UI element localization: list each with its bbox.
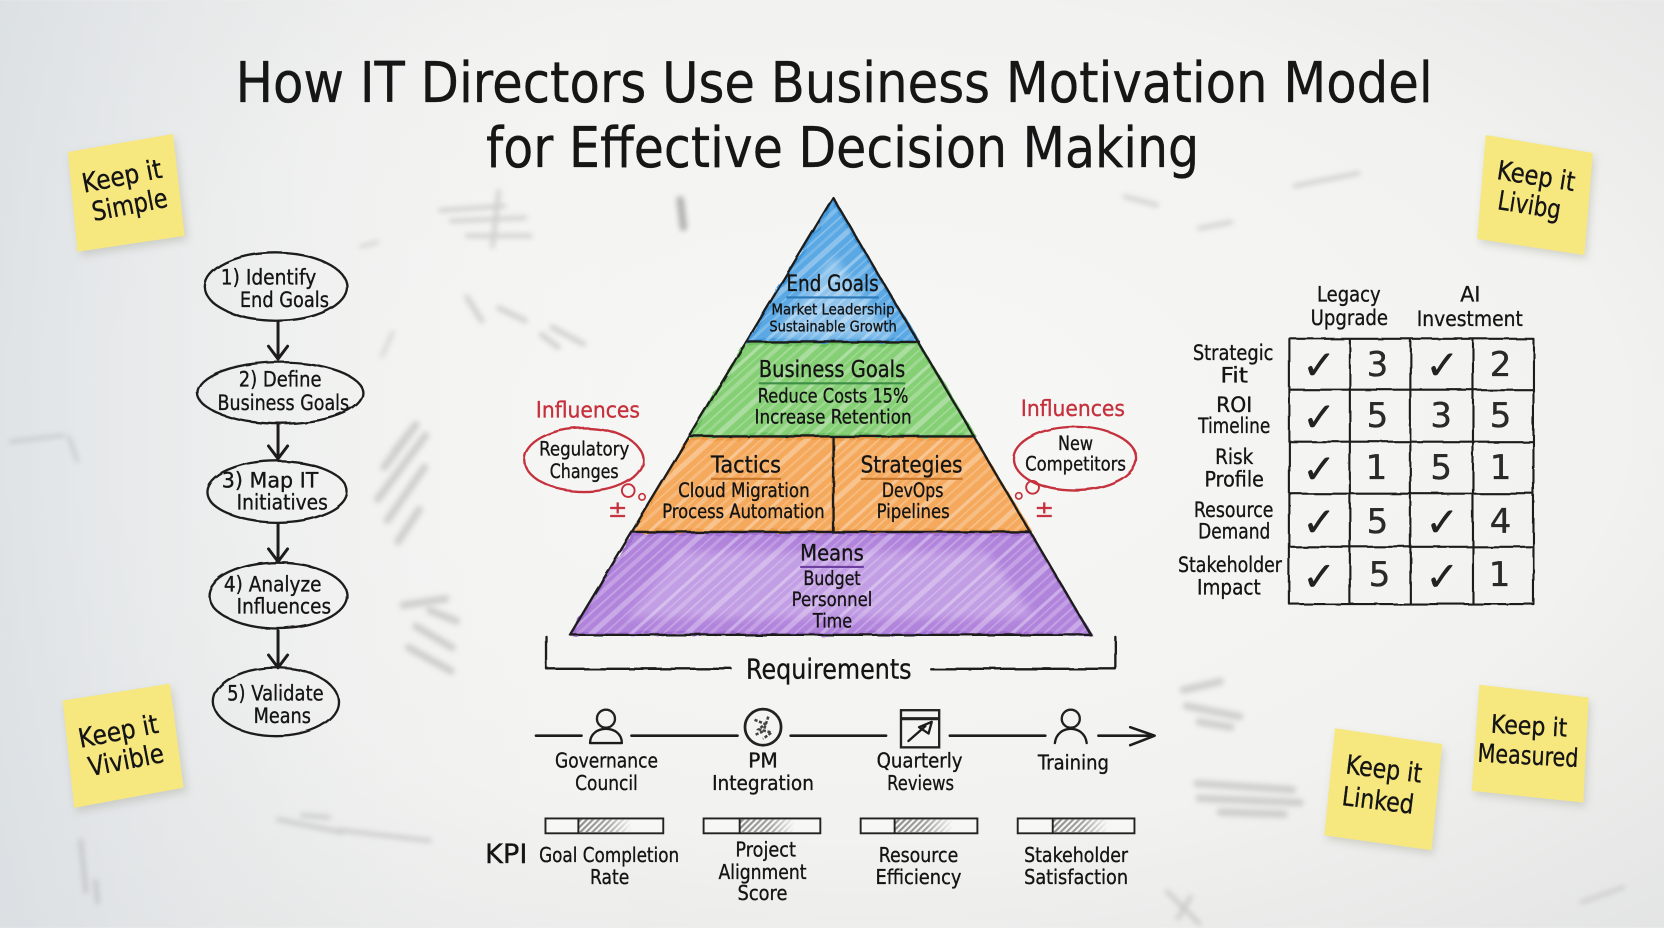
row labels: Fit [1220,363,1248,388]
influence: Regulatory Changes: Regulatory [539,438,629,461]
step 1 [205,253,347,321]
label: Governance Council: Council [575,771,638,795]
column headers: AI [1460,283,1480,308]
influence: New Competitors: New [1058,432,1093,455]
pyramid tier: Strategies: Pipelines [877,500,950,523]
requirements bracket: Requirements [746,652,912,685]
KPI: Project Alignment Score: Score [738,881,787,905]
influence: Regulatory Changes [524,397,645,523]
pyramid tier: Strategies: DevOps [882,479,943,502]
influence: Regulatory Changes: ± [608,495,627,523]
step 5: Means [254,704,311,729]
KPI: Project Alignment Score: Project [735,838,796,862]
KPI row [485,818,1134,905]
step 2 [197,362,363,424]
row labels: Timeline [1197,414,1270,439]
matrix values: 5 [1367,396,1388,436]
arrow: step 3 to 4 [268,523,288,562]
column headers [1311,283,1523,332]
matrix values: 1 [1366,448,1387,488]
matrix values: ✓ [1425,499,1459,546]
step 1: 1) Identify [221,266,316,291]
row labels: Demand [1198,519,1270,544]
pyramid tier: Business Goals: Reduce Costs 15% [758,384,908,407]
sticky note: Keep it Simple: Keep it [79,154,165,200]
matrix values: 1 [1489,555,1510,595]
matrix values: ✓ [1302,553,1336,600]
matrix values: ✓ [1302,499,1336,546]
influence: New Competitors: ± [1034,495,1054,523]
label: Training: Training [1037,751,1109,775]
label: PM Integration: PM [748,749,778,773]
matrix values: 5 [1367,502,1388,542]
pyramid tier: Tactics [634,439,833,531]
matrix values: ✓ [1425,553,1459,600]
influence: New Competitors: Influences [1021,396,1125,422]
pyramid tier: Means: Budget [803,567,861,590]
sticky note: Keep it Livibg [1477,135,1595,259]
matrix values [1302,342,1511,600]
sticky note: Keep it Measured: Measured [1477,739,1579,774]
pyramid tier: Means: Time [812,609,852,632]
matrix values: 2 [1490,345,1511,385]
label: PM Integration [712,749,814,795]
KPI: Resource Efficiency: Resource [879,843,958,867]
arrow: step 2 to 3 [268,425,288,459]
sticky note: Keep it Measured: Keep it [1490,710,1568,744]
KPI: Project Alignment Score: Alignment [718,860,807,884]
row labels: ROI [1216,393,1252,418]
pyramid [570,198,1091,635]
influence: New Competitors [1013,396,1137,523]
KPI: Stakeholder Satisfaction: Stakeholder [1024,843,1129,867]
step 3: 3) Map IT [222,468,319,493]
sticky note: Keep it Vivible: Vivible [86,738,167,783]
pyramid tier: Business Goals [690,344,974,435]
sticky note: Keep it Measured [1472,685,1591,807]
title [236,51,1433,181]
matrix values: ✓ [1425,342,1459,389]
KPI: Project Alignment Score [704,818,820,905]
row labels: Profile [1204,467,1264,492]
influence: Regulatory Changes: Influences [536,397,640,423]
sticky note: Keep it Livibg: Livibg [1496,185,1563,226]
step 4: Influences [237,595,331,620]
pyramid tier: Strategies [833,439,1030,531]
label: Governance Council [555,749,658,795]
label: Quarterly Reviews: Quarterly [877,749,963,773]
KPI: Goal Completion Rate [539,818,679,889]
icon: training person [1055,710,1087,743]
KPI heading: KPI [485,839,527,870]
matrix values: 5 [1369,555,1390,595]
icon: PM integration [745,709,781,745]
step 1: End Goals [240,288,329,313]
matrix values: 3 [1367,345,1388,385]
KPI: Stakeholder Satisfaction: Satisfaction [1024,865,1128,889]
matrix values: ✓ [1302,394,1336,441]
label: PM Integration: Integration [712,771,814,795]
pyramid tier: End Goals [747,202,918,341]
KPI: Resource Efficiency: Efficiency [876,865,962,889]
pyramid tier: Strategies: Strategies [861,450,963,478]
icon: governance council person [590,710,622,743]
KPI: Goal Completion Rate: Goal Completion [539,843,679,867]
row labels [1178,341,1282,601]
pyramid tier: Business Goals: Increase Retention [755,406,912,429]
pyramid tier: Means: Means [800,541,864,567]
label: Quarterly Reviews: Reviews [887,771,954,795]
row labels: Strategic [1193,341,1273,366]
KPI: Stakeholder Satisfaction [1018,818,1134,889]
sticky note: Keep it Linked [1324,728,1444,855]
pyramid tier: Tactics: Process Automation [662,500,825,523]
pyramid tier: Tactics: Tactics [710,450,781,478]
step 4: 4) Analyze [224,572,322,597]
sticky note: Keep it Simple: Simple [89,183,170,228]
title: How IT Directors Use Business Motivation Model [236,51,1433,116]
KPI: Goal Completion Rate: Rate [590,865,629,889]
label: Quarterly Reviews [877,749,963,795]
sticky note: Keep it Linked: Linked [1340,781,1416,821]
step 2: 2) Define [239,368,322,393]
matrix grid [1289,339,1533,604]
sticky note: Keep it Vivible [63,684,187,812]
matrix values: 5 [1490,396,1511,436]
matrix values: 5 [1430,448,1452,488]
row labels: Risk [1215,445,1254,470]
arrow: step 1 to 2 [268,322,288,359]
pyramid tier: Means: Personnel [792,588,872,611]
row labels: Resource [1194,498,1273,523]
row labels: Impact [1197,576,1261,601]
row labels: Stakeholder [1178,553,1282,578]
step 5: 5) Validate [227,682,324,707]
sticky note: Keep it Simple [68,134,188,256]
column headers: Investment [1417,307,1523,332]
pyramid tier: End Goals: Sustainable Growth [769,317,897,335]
process flow [197,253,363,736]
influence: Regulatory Changes: Changes [550,460,619,483]
pyramid tier: Means [572,534,1090,634]
pyramid tier: End Goals: End Goals [786,271,879,297]
matrix values: 1 [1490,448,1511,488]
sticky note: Keep it Vivible: Keep it [76,709,161,755]
requirements timeline [536,709,1155,795]
matrix values: ✓ [1302,446,1336,493]
title: for Effective Decision Making [486,116,1199,181]
sticky note: Keep it Linked: Keep it [1344,750,1424,790]
pyramid outline [570,198,1091,635]
step 3 [207,461,347,522]
pyramid tier: Business Goals: Business Goals [759,355,905,383]
KPI: Resource Efficiency [861,818,977,889]
pyramid tier: End Goals: Market Leadership [772,300,895,318]
pyramid tier: Tactics: Cloud Migration [678,479,810,502]
step 5 [213,668,339,736]
matrix values: 4 [1490,502,1511,542]
column headers: Legacy [1317,283,1381,308]
matrix values: 3 [1430,396,1452,436]
column headers: Upgrade [1311,306,1388,331]
label: Governance Council: Governance [555,749,658,773]
step 3: Initiatives [237,491,328,516]
step 2: Business Goals [218,391,349,416]
decision matrix [1178,283,1533,604]
influence: New Competitors: Competitors [1025,452,1126,475]
arrow: step 4 to 5 [268,631,288,668]
step 4 [209,563,347,628]
icon: quarterly review window [901,710,939,747]
matrix values: ✓ [1302,342,1336,389]
requirements bracket [547,637,1115,685]
sticky note: Keep it Livibg: Keep it [1495,155,1577,198]
